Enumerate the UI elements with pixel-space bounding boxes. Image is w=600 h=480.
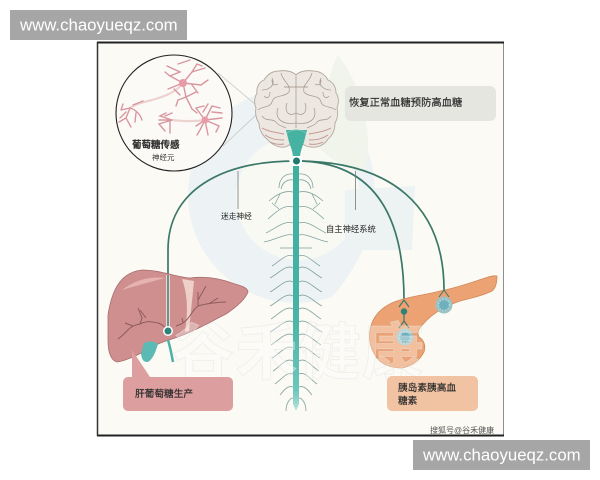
icon: brain — [255, 71, 338, 158]
label: hepatic glucose production — [123, 350, 233, 411]
neuron label: 葡萄糖传感 — [132, 139, 180, 151]
pointer: vagus nerve — [237, 171, 239, 209]
label: insulin and glucagon: 糖素 — [398, 394, 418, 407]
arrow: autonomic nerve to pancreas outer branch — [296, 161, 444, 290]
neuron illustrations — [119, 60, 222, 135]
icon: pancreas — [369, 276, 497, 368]
watermark tag: bottom right: www.chaoyueqz.com — [422, 446, 581, 464]
heading: restore normal blood glucose — [345, 86, 496, 121]
source caption: 搜狐号@谷禾健康 — [430, 425, 494, 435]
icon: nerve junction — [289, 156, 302, 166]
watermark tag: top left: www.chaoyueqz.com — [19, 16, 178, 34]
heading: restore normal blood glucose: 恢复正常血糖预防高血糖 — [349, 96, 462, 109]
arrow: autonomic nerve to pancreas inner branch — [296, 161, 404, 300]
watermark tag: top left — [10, 10, 187, 40]
icon: pancreatic islets — [396, 290, 452, 346]
label: autonomic nervous system: 自主神经系统 — [326, 224, 376, 234]
icon: spinal cord — [293, 152, 299, 411]
icon: liver — [108, 270, 248, 362]
label: insulin and glucagon: 胰岛素胰高血 — [398, 381, 456, 394]
callout lines from brain to neuron circle — [218, 73, 256, 146]
panel: glucose sensing neurons — [116, 55, 232, 171]
background panel — [97, 42, 504, 436]
label: vagus nerve: 迷走神经 — [221, 211, 252, 221]
watermark: brand name: 谷禾健康 — [172, 319, 424, 388]
icon: spinal cord branches — [264, 174, 328, 411]
label: hepatic glucose production: 肝葡萄糖生产 — [135, 387, 193, 400]
label: insulin and glucagon — [387, 376, 478, 411]
neuron sub-label: 神经元 — [152, 152, 175, 162]
pointer: autonomic nervous system — [354, 171, 356, 210]
watermark tag: bottom right — [413, 440, 590, 470]
arrow: vagus nerve to liver — [168, 161, 296, 331]
